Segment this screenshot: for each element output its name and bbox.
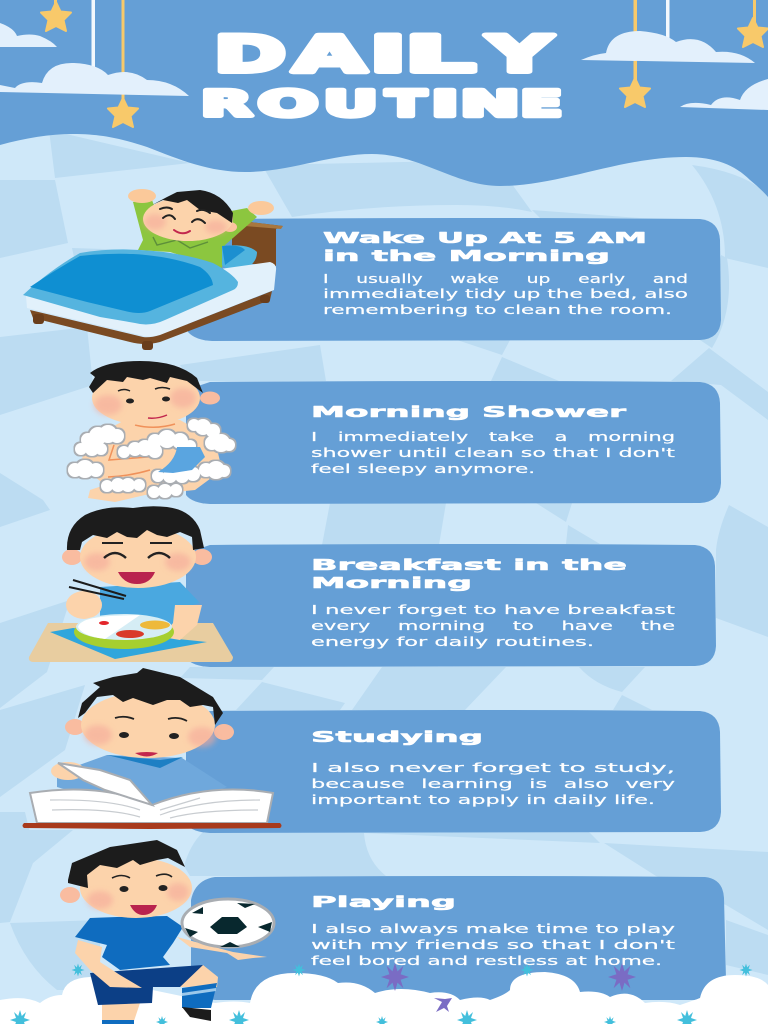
illustration: boy waking up in bed: [23, 189, 283, 350]
illustration: boy studying with book: [22, 668, 282, 829]
text: morning shower: shower until clean so that I don't: [311, 446, 676, 460]
illustration: boy playing football: [60, 840, 274, 1024]
text: playing: [311, 922, 676, 968]
text: wake up: I usually wake up early and: [323, 272, 688, 286]
text: breakfast: I never forget to have breakfast: [311, 603, 676, 617]
panel: playing: [191, 876, 726, 1000]
sparkles: [10, 963, 752, 1024]
heading: breakfast: [311, 556, 627, 592]
icon: star top left: [41, 2, 71, 31]
text: breakfast: [311, 603, 676, 649]
title: R: [201, 84, 252, 125]
icon: football: [182, 899, 274, 947]
heading: wake up: in the Morning: [323, 247, 610, 265]
heading: wake up: [323, 229, 647, 265]
hanging clouds and stars: [0, 0, 768, 127]
text: morning shower: [311, 430, 676, 476]
text: playing: feel bored and restless at home.: [311, 954, 662, 968]
text: wake up: immediately tidy up the bed, also: [323, 287, 688, 301]
text: wake up: [323, 272, 688, 317]
text: morning shower: feel sleepy anymore.: [311, 462, 535, 476]
illustration: boy showering with foam: [68, 361, 235, 502]
text: breakfast: energy for daily routines.: [311, 635, 594, 649]
heading: wake up: Wake Up At 5 AM: [323, 229, 647, 247]
title: U: [324, 84, 378, 125]
heading: breakfast: Morning: [311, 574, 472, 592]
icon: star under right cloud: [620, 78, 650, 107]
text: morning shower: I immediately take a morning: [311, 430, 675, 444]
panel: wake up: [188, 218, 721, 341]
panel: breakfast: [186, 544, 716, 667]
title: Y: [485, 26, 553, 84]
title: O: [258, 84, 318, 125]
text: playing: I also always make time to play: [311, 922, 675, 936]
title: T: [386, 84, 427, 125]
text: studying: important to apply in daily life.: [311, 793, 655, 807]
text: studying: [311, 761, 675, 807]
title: I: [370, 26, 406, 84]
panel: morning shower: [186, 381, 721, 504]
icon: cloud right: [581, 31, 755, 63]
heading: playing: Playing: [311, 893, 456, 911]
title: L: [405, 26, 475, 84]
heading: morning shower: Morning Shower: [311, 403, 627, 421]
heading: breakfast: Breakfast in the: [311, 556, 627, 574]
title: [201, 26, 562, 125]
text: playing: with my friends so that I don't: [311, 938, 676, 952]
text: studying: I also never forget to study,: [311, 761, 675, 775]
title: I: [432, 84, 458, 125]
clouds at bottom: [0, 972, 768, 1024]
icon: cloud top left: [0, 23, 57, 47]
title: A: [293, 26, 367, 84]
title: D: [214, 26, 286, 84]
icon: star top right: [738, 18, 768, 47]
text: studying: because learning is also very: [311, 777, 675, 791]
title: N: [460, 84, 520, 125]
illustration: boy eating breakfast: [29, 506, 233, 662]
icon: cloud left: [0, 63, 189, 96]
text: wake up: remembering to clean the room.: [323, 303, 672, 317]
icon: cloud lower right: [680, 79, 768, 110]
header banner with wavy edge: [0, 0, 768, 197]
icon: star under left cloud: [108, 98, 138, 127]
foam bubbles: [68, 419, 235, 498]
text: breakfast: every morning to have the: [311, 619, 675, 633]
panel: studying: [186, 710, 721, 833]
heading: studying: Studying: [311, 728, 483, 746]
title: E: [520, 84, 562, 125]
